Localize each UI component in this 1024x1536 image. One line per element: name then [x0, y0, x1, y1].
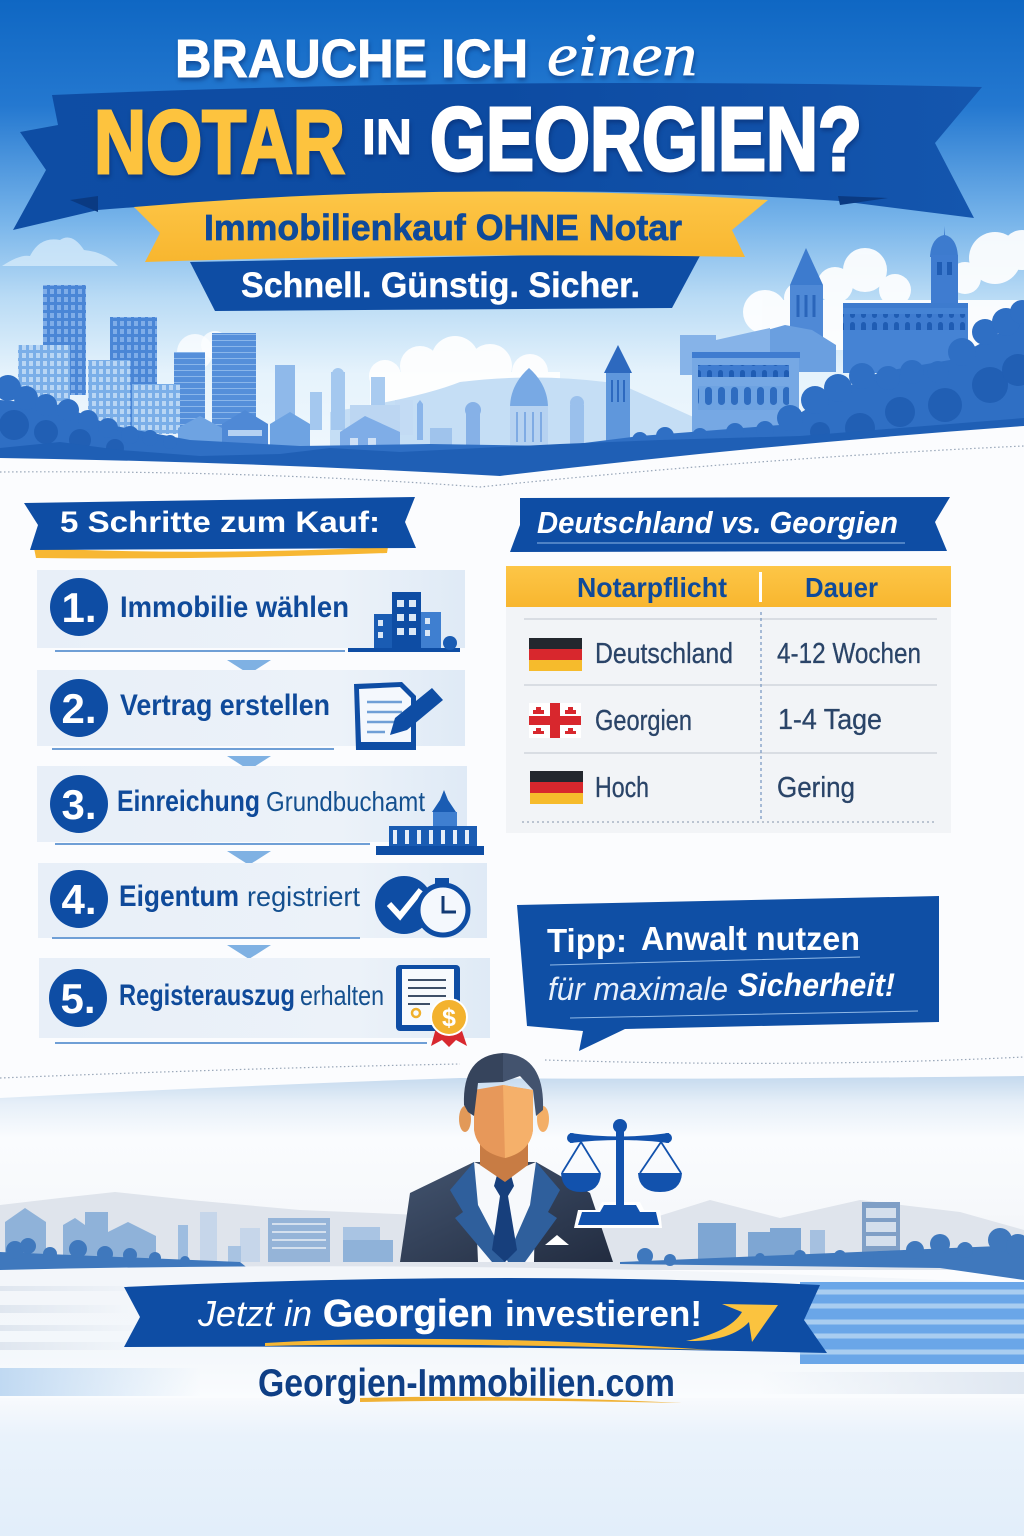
table header — [506, 566, 951, 607]
icon: certificate with medal: $ — [442, 1004, 456, 1032]
step 5 label: Registerauszug — [119, 979, 295, 1012]
banner title text: GEORGIEN? — [430, 90, 862, 190]
lapels — [450, 1162, 560, 1262]
number 3: 3. — [61, 781, 97, 828]
number 2: 2. — [61, 685, 97, 732]
step 2 — [37, 670, 465, 750]
arrow 4 — [227, 945, 271, 959]
icon: scales of justice — [561, 1119, 682, 1228]
heading: Deutschland vs. Georgien — [510, 497, 950, 552]
clouds — [177, 230, 1024, 412]
step 4 label — [119, 880, 360, 913]
step 4 label: registriert — [247, 881, 360, 912]
neck — [480, 1135, 528, 1182]
skyline: centre dome and tower — [417, 345, 632, 458]
step 1 label: Immobilie wählen — [120, 591, 349, 624]
tie — [492, 1175, 517, 1262]
heading: Deutschland vs. Georgien: Deutschland vs. Georgien — [537, 505, 898, 540]
hill — [330, 377, 700, 460]
table header: Dauer — [805, 572, 878, 603]
main title banner — [13, 83, 982, 230]
yellow ribbon: Immobilienkauf — [134, 191, 768, 262]
step 5 — [39, 958, 490, 1047]
row: Georgien: Georgien — [595, 705, 692, 737]
footer background — [0, 1266, 1024, 1536]
step 3 — [37, 766, 484, 855]
callout: Tipp: für maximale — [548, 971, 728, 1007]
lower band — [0, 1057, 1024, 1280]
banner title text: IN — [362, 109, 412, 165]
comparison table — [506, 566, 951, 833]
panel: hero sky — [0, 0, 1024, 480]
row: Hoch / Gering: Gering — [777, 772, 855, 804]
callout: Tipp: Sicherheit! — [738, 967, 895, 1003]
website: Georgien-Immobilien.com — [258, 1362, 675, 1405]
distant skyline left — [5, 1208, 393, 1262]
hair light side — [503, 1053, 543, 1116]
pocket square — [545, 1235, 569, 1245]
number 4 — [50, 870, 108, 928]
number 2 — [50, 679, 108, 737]
skyline: left high-rises — [18, 285, 413, 435]
ears — [459, 1106, 549, 1132]
step 4 — [38, 863, 487, 939]
row: Hoch / Gering — [530, 771, 855, 804]
callout: Tipp: Anwalt nutzen — [641, 920, 860, 957]
shirt — [474, 1162, 536, 1262]
step 3 label — [117, 785, 425, 818]
step 1 — [37, 570, 465, 652]
call-to-action banner: Georgien — [323, 1293, 493, 1335]
call-to-action banner — [124, 1278, 827, 1353]
number 4: 4. — [61, 876, 97, 923]
title line 1: einen — [547, 22, 697, 88]
row: Georgien — [529, 703, 882, 738]
title line 1: BRAUCHE ICH — [175, 29, 528, 89]
row: Georgien: 1-4 Tage — [778, 704, 882, 736]
icon: certificate with medal — [396, 965, 467, 1047]
face — [474, 1085, 533, 1158]
table header: Notarpflicht — [577, 572, 727, 603]
arrow 1 — [227, 660, 271, 674]
row: Hoch / Gering: Hoch — [595, 772, 649, 804]
mountains — [0, 1192, 1024, 1270]
step 3 label: Grundbuchamt — [266, 786, 425, 817]
heading: 5 Schritte — [24, 497, 416, 558]
small cloud left — [2, 238, 118, 266]
arrow 3 — [227, 851, 271, 865]
suit — [400, 1162, 613, 1262]
callout: Tipp — [517, 896, 939, 1051]
number 5 — [49, 969, 107, 1027]
callout: Tipp: Tipp: — [547, 922, 627, 959]
skyline: right palace and towers — [680, 226, 968, 442]
icon: buildings — [348, 592, 460, 652]
banner title text: NOTAR — [94, 93, 345, 193]
number 1: 1. — [61, 584, 97, 631]
step 3 label: Einreichung — [117, 785, 260, 818]
row: Deutschland: 4-12 Wochen — [777, 638, 921, 670]
call-to-action banner: Jetzt in — [197, 1293, 312, 1334]
gold underline — [265, 1339, 712, 1350]
number 1 — [50, 578, 108, 636]
arrow — [686, 1304, 778, 1342]
step 5 label: erhalten — [300, 980, 384, 1011]
call-to-action banner: investieren! — [505, 1293, 702, 1334]
number 3 — [50, 775, 108, 833]
skyline: trees — [0, 300, 1024, 480]
heading: 5 Schritte: 5 Schritte zum Kauf: — [60, 506, 380, 539]
skyline: houses — [178, 410, 452, 460]
banner title text — [94, 90, 862, 193]
hair — [464, 1053, 503, 1116]
arrow 2 — [227, 756, 271, 770]
icon: check and clock — [375, 876, 468, 935]
step 4 label: Eigentum — [119, 880, 239, 913]
yellow ribbon: Immobilienkauf: Immobilienkauf OHNE Notar — [204, 207, 682, 248]
dark ribbon: Schnell Günstig Sicher: Schnell. Günstig. Sicher. — [241, 266, 640, 305]
lawyer figure — [400, 1053, 613, 1262]
row: Deutschland: Deutschland — [595, 638, 733, 670]
number 5: 5. — [60, 975, 96, 1022]
icon: land registry building — [376, 790, 484, 855]
row: Deutschland — [529, 638, 921, 671]
dark ribbon: Schnell Günstig Sicher — [190, 252, 702, 311]
icon: contract and pen — [354, 682, 443, 750]
white wave divider — [0, 426, 1024, 1100]
face light side — [503, 1085, 533, 1158]
distant skyline right — [698, 1202, 900, 1263]
title line 1 — [175, 22, 697, 89]
tree line — [0, 1228, 1024, 1280]
step 2 label: Vertrag erstellen — [120, 689, 330, 722]
